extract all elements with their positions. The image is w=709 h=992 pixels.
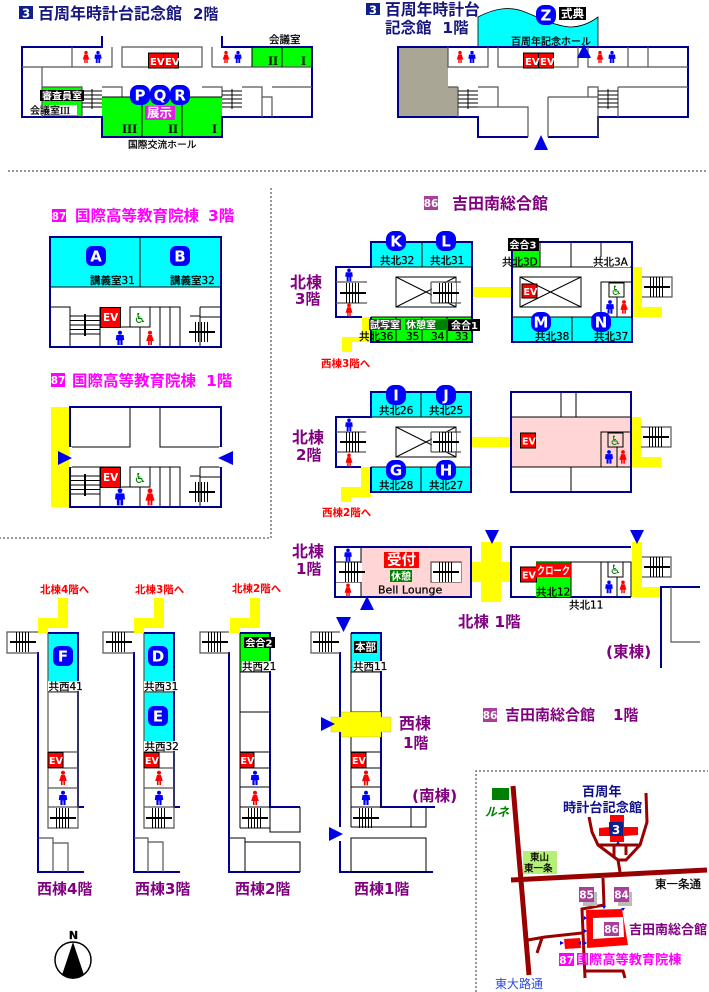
building 86 footprint [586,909,707,948]
room markers K L M N: M [534,314,548,332]
floor plan walls W3F [103,632,180,872]
elevator W3F: EV [145,756,159,767]
building 86 footprint: 吉田南総合館 [629,922,707,938]
room markers K L M N: L [441,232,451,250]
room marker F [53,646,73,666]
title: west 2F: 西棟2階 [235,880,290,898]
yellow connectors 1F [471,542,661,602]
elevators 2F [148,53,180,68]
room labels W1F [353,640,388,673]
room markers P Q R: P [134,86,146,104]
cyan lecture rooms [51,238,220,287]
room labels north 2F: 共北25 [429,405,463,417]
floor label north 2F: 北棟 [292,428,324,447]
room labels north 3F: 会合1 [451,319,478,332]
elevator W2F [240,752,255,768]
hall labels: 百周年記念ホール [511,35,591,48]
entrance arrows 87-1F [58,451,233,465]
heading: building 86 1F: 86 [483,710,497,722]
room labels north 3F: 共北32 [380,255,414,267]
panel: west wing 4F [7,583,92,898]
heading: building 86 1F: 吉田南総合館 [505,706,595,724]
heading: building 87 3F: 国際高等教育院棟 [75,206,200,225]
room markers A B [86,246,190,266]
heading: building 87 1F: 1階 [206,372,233,390]
floor plan walls north 3F east [512,242,672,342]
room labels W3F: 共西32 [144,741,179,753]
bus stop label: 東一条 [524,862,553,874]
accessibility and restroom icons 87-3F [116,311,154,345]
floor plan walls 2F [22,36,312,137]
room labels W2F: 共西21 [242,661,276,673]
restroom icons north 3F: ♿ [611,284,622,299]
restroom icons 1F [457,51,616,63]
floor plan walls 1F [398,47,688,137]
heading: building 87 1F: 87 [51,375,65,387]
room markers I J G H: I [393,386,399,404]
floor plan walls north 1F west [335,547,471,597]
elevator 87-3F [100,308,120,328]
title: south wing: (南棟) [412,786,457,805]
restroom icons W2F [251,771,259,805]
room labels W1F: 共西11 [353,661,387,673]
east wing outline [661,587,700,668]
heading: building 87 3F [52,206,235,225]
room labels north 3F: 会合3 [510,238,536,252]
building 3 clock tower [563,783,642,844]
room labels north 2F: 共北28 [379,480,413,492]
title: east wing: (東棟) [606,642,651,661]
floor plan walls north 1F east [511,547,671,597]
cloak and room labels: クローク [537,565,570,577]
room labels north 3F: 試写室 [370,318,400,332]
room labels north 3F: 共北31 [430,255,464,267]
room labels north 3F: 休憩室 [406,318,436,332]
building 3 clock tower: 3 [612,823,620,837]
yellow connector W3F [134,598,164,633]
green room W2F [240,633,270,672]
floor label north 2F: 2階 [296,446,321,464]
room markers P Q R [130,85,190,105]
restroom icons north 1F: ♿ [610,563,621,578]
rooms colored 3F [371,242,632,342]
room labels north 3F: 共北3D [502,256,538,268]
note: to north 4F: 北棟4階へ [40,583,90,596]
entrance arrows W1F [321,617,351,841]
floor plan walls W4F [7,632,84,872]
room labels W2F: 会合2 [246,636,272,650]
room markers K L M N [386,231,611,332]
note: to north 2F: 北棟2階へ [232,582,282,595]
room labels north 3F: 共北37 [594,331,628,343]
small entrance markers [560,906,625,945]
panel: clock tower memorial hall 2F [19,4,312,151]
heading: building 86 1F: 1階 [613,706,638,724]
accessibility and restroom icons 87-1F: ♿ [134,471,146,487]
cloak and room labels: 共北11 [569,600,603,612]
room labels 2F: 展示 [147,105,172,120]
restroom icons 2F [83,51,242,63]
heading: clock tower 1F: 百周年時計台 [385,0,480,19]
room marker Z [536,5,556,25]
heading: building 86: 86 [424,198,438,210]
heading: clock tower 2F: 百周年時計台記念館 [38,4,182,23]
floor plan walls north 2F west [336,392,471,492]
heading: clock tower 2F: 2階 [193,5,218,23]
panel: west wing 3F [103,583,190,898]
green conference rooms [42,47,312,137]
floor label north 1F side: 1階 [296,560,321,578]
elevator north 3F: EV [524,287,538,298]
building 3 clock tower: 百周年 [582,783,622,800]
elevator north 3F [522,284,538,298]
panel: north wing 1F [292,530,700,668]
elevators 2F: EV [150,57,165,68]
note: to west wing 2F: 西棟2階へ [322,506,372,519]
floor label north 1F side: 北棟 [292,542,324,561]
room labels north 3F: 34 [431,331,445,343]
room labels 87-3F [90,274,215,287]
room markers D E: E [153,708,163,726]
floor plan walls north 2F east [511,392,671,492]
room labels north 3F: 33 [455,331,468,343]
restroom icons north 3F [345,269,628,316]
title: west 3F: 西棟3階 [135,880,190,898]
cyan room W4F [48,633,78,692]
heading: clock tower 2F: 3 [22,6,30,20]
room markers A B: B [174,248,186,266]
room labels 2F: 会議室III [30,104,70,117]
floor plan walls north 3F west [336,242,472,342]
floor label north 1F side [292,542,324,578]
restroom icons north 2F [345,419,627,466]
room marker F: F [58,648,68,666]
elevators 1F: EV [525,57,540,68]
building numbers 85 84: 84 [614,890,629,902]
room labels north 2F: 共北26 [379,405,414,417]
entrance arrows 1F [534,44,591,150]
elevator W1F [351,752,366,768]
building 87 footprint: 国際高等教育院棟 [576,951,682,968]
heading: building 87 3F: 3階 [208,207,235,225]
room labels 2F: I [301,53,306,68]
restroom icons north 2F: ♿ [610,434,621,449]
note: to west wing 3F: 西棟3階へ [321,357,371,370]
memorial hall cyan room [478,9,598,47]
hall labels [511,6,591,48]
heading: building 87 3F: 87 [52,211,66,223]
room labels north 3F: 共北38 [535,331,569,343]
floor label north 3F: 3階 [295,290,320,308]
room labels north 2F [379,405,463,492]
accessibility and restroom icons 87-3F: ♿ [134,311,146,327]
restroom icons W3F [155,771,163,805]
lobby labels: Bell Lounge [378,584,443,596]
yellow crossing W1F [331,712,391,737]
building 86 footprint: 86 [604,924,619,936]
lobby labels: 受付 [387,551,416,569]
entrance arrows north 1F [360,530,644,610]
cloak and room labels [536,563,603,612]
bus stop label: 東山 [530,852,549,864]
room labels 87-3F: 講義室31 [90,274,135,287]
room labels 2F: I [212,121,217,136]
room labels 2F: 会議室 [269,33,300,46]
elevator W4F [48,752,63,768]
room labels north 3F: 共北36 [359,331,394,343]
room labels 2F: III [122,121,137,136]
heading: building 87 1F [51,371,233,390]
elevator north 1F: EV [522,570,536,582]
elevator W3F [144,752,159,768]
elevator 87-1F: EV [103,472,119,484]
panel: west wing 2F [200,582,300,898]
cyan rooms W3F [144,633,174,751]
building 87 footprint: 87 [559,955,574,967]
street label: Higashioji: 東大路通 [495,976,543,991]
room labels W1F: 本部 [355,640,376,654]
room markers A B: A [90,248,102,266]
room labels 2F [30,33,306,151]
elevator north 1F [520,567,536,582]
heading: building 86 1F [483,706,638,724]
floor plan walls 87-1F [69,407,223,507]
room labels 2F: II [168,121,178,136]
elevator north 2F [520,433,536,448]
panel: north wing 2F [292,385,671,519]
yellow connector walkway [51,407,70,507]
lobby labels: 休憩 [391,570,411,583]
room labels 2F: 審査員室 [42,90,82,102]
room markers D E [148,646,168,726]
room markers I J G H: H [440,462,452,480]
heading: clock tower 1F: 3 [369,3,377,17]
heading: building 87 1F: 国際高等教育院棟 [72,371,197,390]
room markers K L M N: K [390,232,403,250]
floor plan walls W2F [200,632,300,872]
heading: clock tower 1F [366,0,480,37]
room marker Z: Z [541,6,552,24]
cloak and room labels: 共北12 [536,586,570,598]
title: west 4F: 西棟4階 [37,880,92,898]
room markers I J G H: J [442,386,449,404]
cyan room W1F [351,633,381,672]
hall labels: 式典 [561,6,584,20]
room markers D E: D [152,648,164,666]
street label: Higashi-ichijo: 東一条通 [655,877,701,891]
rooms colored 2F [371,392,631,492]
room labels north 2F: 共北27 [429,480,463,492]
elevator 87-1F [100,468,120,488]
room labels W2F [242,636,277,673]
elevator W1F: EV [352,756,366,767]
yellow connectors 3F [342,267,662,352]
landmark Rune [485,788,510,819]
room labels 2F: 国際交流ホール [128,139,197,151]
floor label west 1F: 西棟 [399,714,431,733]
title: west 1F: 西棟1階 [354,880,409,898]
heading: clock tower 1F: 記念館 1階 [385,19,469,37]
out-of-bounds grey area [399,48,458,116]
elevator north 2F: EV [522,436,536,448]
restroom icons W4F [59,771,67,805]
floor plan walls 87-3F [50,237,221,347]
panel: campus location map [485,783,707,991]
room labels W3F: 共西31 [144,681,178,693]
building 3 clock tower: 時計台記念館 [563,799,642,816]
heading: building 86: 吉田南総合館 [452,194,548,213]
floor label north 2F [292,428,324,464]
elevator W4F: EV [49,756,63,767]
room labels north 3F: 35 [406,331,419,343]
restroom icons W1F [362,770,370,805]
panel: north wing 3F [290,231,672,370]
room labels W3F [144,681,180,753]
room labels north 3F [359,238,630,343]
room markers P Q R: R [174,86,186,104]
room markers K L M N: N [595,314,607,332]
room labels 2F: II [268,53,278,68]
room labels north 3F: 共北3A [593,256,629,268]
title: north wing 1F: 北棟 1階 [458,612,521,631]
building 87 footprint [559,938,682,968]
yellow connector W2F [230,598,260,633]
roads [511,786,707,978]
accessibility and restroom icons 87-1F [115,471,155,505]
room markers I J G H: G [390,462,402,480]
landmark Rune: ルネ [485,805,510,819]
elevator W2F: EV [240,756,255,767]
floor plan walls W1F [311,632,435,872]
lobby labels [378,551,443,596]
note: to north 3F: 北棟3階へ [135,583,185,596]
pink lobby [361,548,471,597]
floor label north 3F: 北棟 [290,273,322,292]
elevators 1F: EV [540,57,555,68]
floor label west 1F: 1階 [403,734,428,752]
room markers P Q R: Q [154,86,166,104]
icon: compass north: N [69,929,78,942]
room labels 87-3F: 講義室32 [170,274,215,287]
building numbers 85 84: 85 [579,890,594,902]
icon: compass north [55,929,91,979]
restroom icons north 1F [344,549,626,596]
floor label north 3F [290,273,322,308]
building numbers 85 84 [579,887,632,906]
yellow connector W4F [38,598,68,633]
panel: clock tower memorial hall 1F [366,0,688,150]
elevators 1F [524,53,555,68]
panel: building 87 1F [51,371,233,507]
room markers I J G H [386,385,456,480]
elevators 2F: EV [165,57,180,68]
bus stop label [523,851,557,874]
room label W4F: 共西41 [48,681,83,693]
panel: west wing 1F [311,617,457,898]
yellow connectors 2F [341,417,661,502]
floor label west 1F [399,714,431,752]
panel: building 87 3F [50,206,235,347]
elevator 87-3F: EV [103,312,119,324]
